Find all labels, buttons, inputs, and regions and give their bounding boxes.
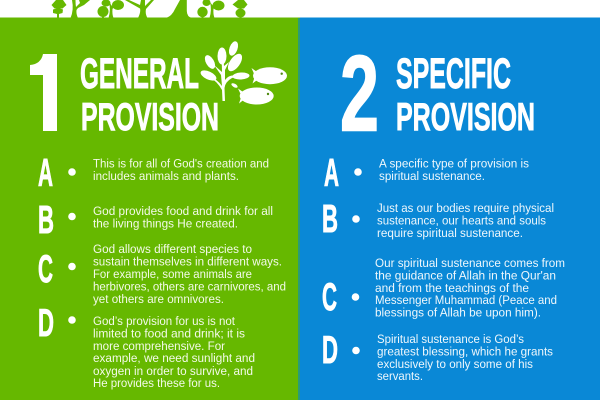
item B: the living things He created. [93, 216, 238, 230]
item D: more comprehensive. For [93, 339, 225, 353]
item D: God’s provision for us is not [93, 314, 236, 328]
item D: D [322, 329, 338, 372]
panel: specific provision [300, 18, 600, 400]
icon: upper fish [252, 67, 287, 84]
item C: the guidance of Allah in the Qur'an [375, 268, 556, 282]
item D: Spiritual sustenance is God’s [377, 332, 524, 346]
item C: sustain themselves in different ways. [93, 254, 282, 268]
item D: example, we need sunlight and [93, 351, 255, 365]
item A: A [38, 152, 53, 195]
heading: general provision: GENERAL [80, 50, 199, 98]
item C: Our spiritual sustenance comes from [375, 256, 565, 270]
item B: sustenance, our hearts and souls [377, 214, 546, 228]
numeral 2: 2 [340, 32, 379, 154]
numeral 1 [30, 54, 57, 131]
tree silhouettes above the green panel [52, 0, 248, 18]
item C: For example, some animals are [93, 267, 252, 281]
item D [38, 302, 255, 390]
item D: limited to food and drink; it is [93, 326, 245, 340]
heading: specific provision: SPECIFIC [396, 50, 511, 98]
item D [322, 329, 553, 383]
item B: B [38, 199, 54, 242]
item A: A specific type of provision is [379, 156, 529, 170]
item D: D [38, 302, 54, 345]
item D: He provides these for us. [93, 376, 220, 390]
item A: includes animals and plants. [93, 169, 239, 183]
item C [38, 242, 286, 306]
item D: greatest blessing, which he grants [377, 344, 553, 358]
panel: general provision: 1 [28, 32, 56, 155]
item B [38, 199, 273, 242]
item B: B [322, 198, 338, 241]
icon: plant and fish [199, 40, 287, 104]
item C [322, 256, 565, 320]
item B: God provides food and drink for all [93, 204, 273, 218]
item C: Messenger Muhammad (Peace and [375, 293, 557, 307]
item C: blessings of Allah be upon him). [375, 306, 541, 320]
panel: general provision [0, 18, 300, 400]
item C: herbivores, others are carnivores, and [93, 280, 286, 294]
item C: C [38, 248, 53, 291]
heading: specific provision [396, 50, 535, 139]
item A: spiritual sustenance. [379, 169, 485, 183]
item B [322, 198, 554, 241]
icon: lower fish [238, 88, 274, 104]
item C: and from the teachings of the [375, 281, 529, 295]
item A [38, 152, 269, 195]
item C: C [322, 276, 337, 319]
item D: oxygen in order to survive, and [93, 364, 253, 378]
item B: require spiritual sustenance. [377, 226, 523, 240]
item D: servants. [377, 369, 423, 383]
item B: Just as our bodies require physical [377, 201, 554, 215]
heading: general provision: PROVISION [81, 96, 219, 139]
item A [324, 152, 529, 195]
item C: God allows different species to [93, 242, 252, 256]
item D: exclusively to only some of his [377, 357, 533, 371]
item A: A [324, 152, 339, 195]
heading: general provision [80, 50, 219, 139]
item A: This is for all of God's creation and [93, 156, 269, 170]
item C: yet others are omnivores. [93, 292, 224, 306]
